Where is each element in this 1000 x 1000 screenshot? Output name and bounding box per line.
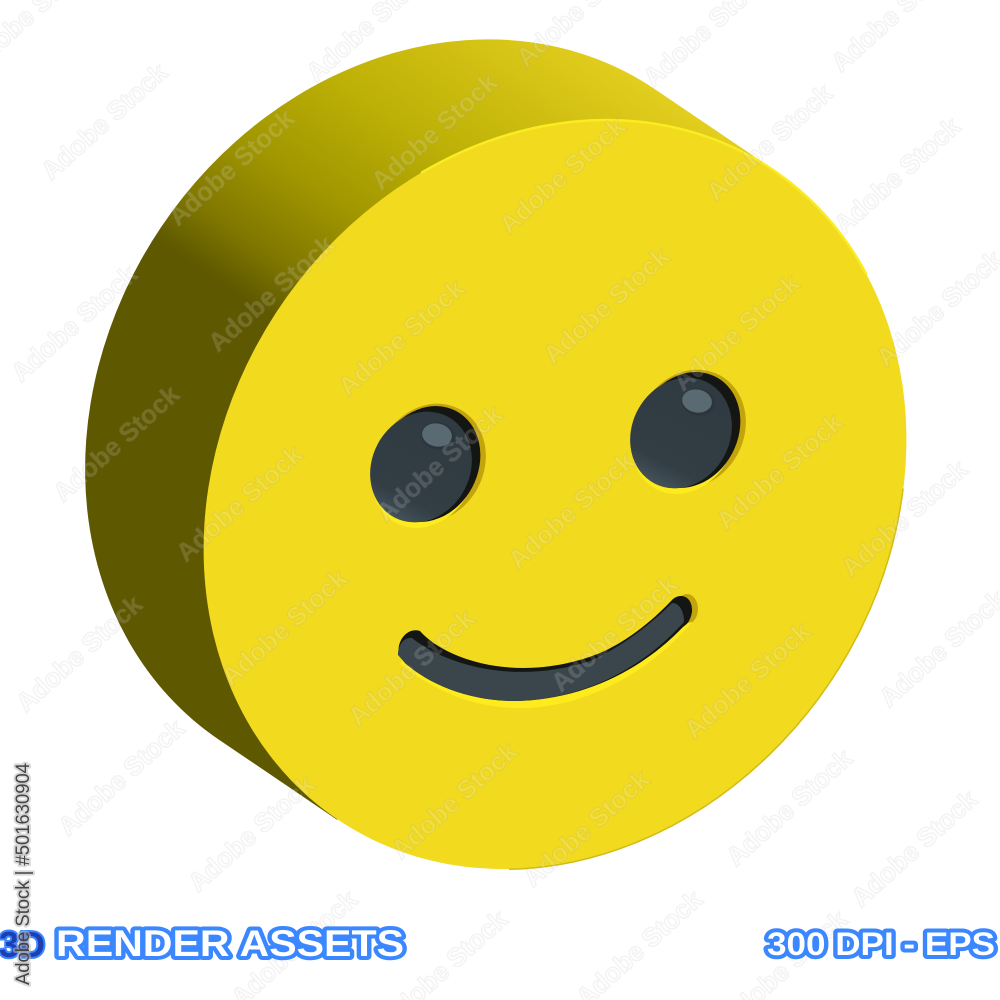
watermark: Adobe Stock pattern: Adobe Stock [517, 764, 655, 893]
watermark: Adobe Stock pattern: Adobe Stock [10, 589, 148, 718]
watermark: Adobe Stock pattern: Adobe Stock [667, 268, 805, 397]
smile [398, 594, 698, 708]
smile recess [399, 596, 692, 701]
right eye [611, 350, 766, 512]
watermark: Adobe Stock pattern: Adobe Stock [47, 379, 185, 508]
watermark: Adobe Stock pattern: Adobe Stock [537, 241, 675, 370]
smile end bevel [676, 594, 698, 624]
face lower rim shade [509, 488, 903, 869]
face rim highlight [421, 120, 867, 275]
watermark: Adobe Stock pattern: Adobe Stock [365, 67, 503, 196]
watermark: Adobe Stock pattern: Adobe Stock [182, 769, 320, 898]
watermark: Adobe Stock pattern: Adobe Stock [202, 229, 340, 358]
watermark: Adobe Stock pattern: Adobe Stock [215, 563, 353, 692]
watermark: Adobe Stock pattern: Adobe Stock [5, 259, 143, 388]
smile grey fill [398, 603, 684, 701]
watermark: Adobe Stock pattern: Adobe Stock [678, 616, 816, 745]
watermark: Adobe Stock pattern: Adobe Stock [845, 784, 983, 913]
watermark: Adobe Stock pattern: Adobe Stock [545, 569, 683, 698]
left eye [351, 384, 506, 546]
watermark: Adobe Stock pattern: Adobe Stock [342, 603, 480, 732]
watermark: Adobe Stock pattern: Adobe Stock [35, 57, 173, 186]
watermark: Adobe Stock pattern: Adobe Stock [493, 111, 631, 240]
watermark: Adobe Stock pattern: Adobe Stock [332, 273, 470, 402]
watermark: Adobe Stock pattern: Adobe Stock [700, 78, 838, 207]
stock id vertical text: Adobe Stock | #501630904 [12, 763, 34, 985]
watermark: Adobe Stock pattern: Adobe Stock [502, 446, 640, 575]
watermark: Adobe Stock pattern: Adobe Stock [720, 743, 858, 872]
watermark: Adobe Stock pattern: Adobe Stock [52, 713, 190, 842]
watermark: Adobe Stock pattern: Adobe Stock [828, 111, 966, 240]
watermark: Adobe Stock pattern: Adobe Stock [170, 439, 308, 568]
watermark: Adobe Stock pattern: Adobe Stock [162, 103, 300, 232]
label: RENDER ASSETS: RENDER ASSETS [56, 923, 404, 964]
watermark: Adobe Stock pattern: Adobe Stock [385, 736, 523, 865]
smile bright lip [400, 622, 692, 708]
coin side wall [85, 39, 773, 820]
watermark: Adobe Stock pattern: Adobe Stock [370, 399, 508, 528]
label: 300 DPI - EPS: 300 DPI - EPS [767, 926, 995, 962]
watermark: Adobe Stock pattern: Adobe Stock [835, 454, 973, 583]
label: 3D: 3D [0, 924, 45, 965]
watermark: Adobe Stock pattern: Adobe Stock [710, 407, 848, 536]
